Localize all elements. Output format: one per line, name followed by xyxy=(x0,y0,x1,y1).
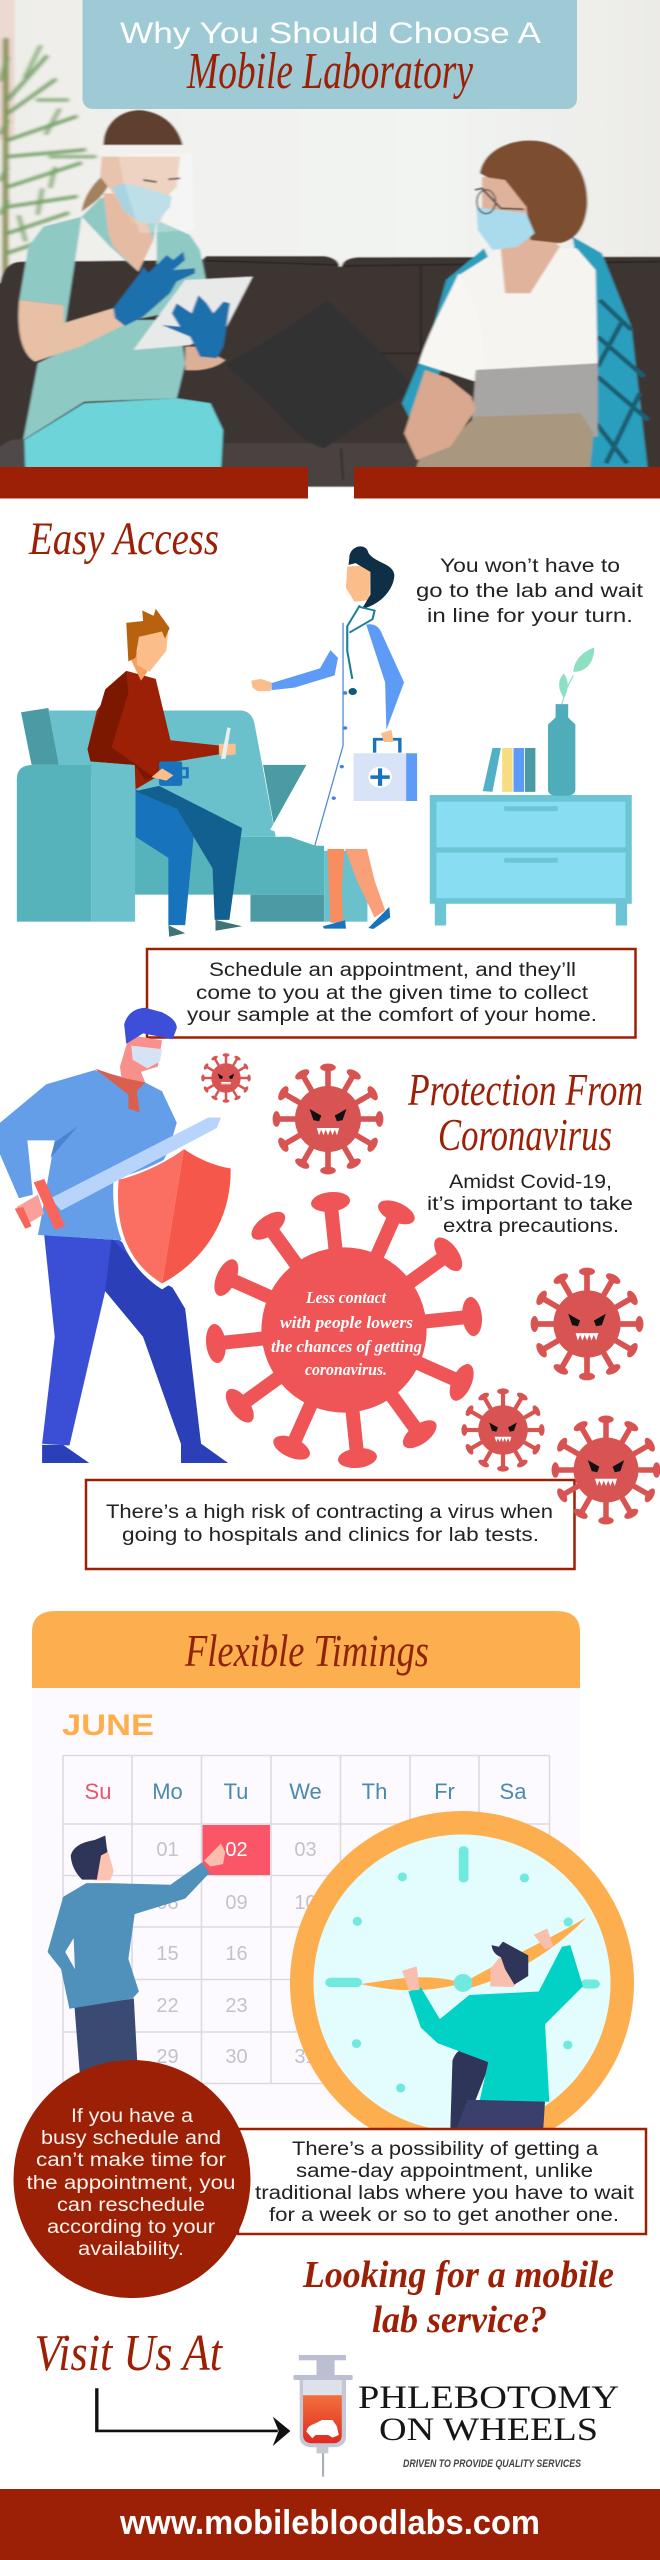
calendar header xyxy=(32,1611,580,1688)
callout: same-day appointment: traditional labs where you have to wait xyxy=(255,2183,635,2204)
callout: high risk at hospitals: There’s a high risk of contracting a virus when xyxy=(106,1502,553,1523)
calendar dates: 03 xyxy=(294,1839,317,1861)
callout: schedule an appointment xyxy=(147,949,636,1038)
text: take extra precautions xyxy=(427,1171,633,1237)
call to action heading: lab service? xyxy=(372,2299,547,2341)
brand name: PHLEBOTOMY xyxy=(358,2380,619,2416)
calendar dates: 15 xyxy=(156,1943,179,1965)
icon: virus over callout xyxy=(552,1416,660,1524)
call to action heading: Looking for a mobile xyxy=(302,2254,614,2296)
weekday headers: Tu xyxy=(224,1779,248,1804)
callout: red circle about rescheduling: can reschedule xyxy=(57,2195,205,2216)
arrow to the logo xyxy=(97,2388,290,2446)
heading: easy access: Easy Access xyxy=(28,513,219,565)
hero photo: nurse and patient on a sofa xyxy=(0,0,660,487)
weekday headers: Su xyxy=(85,1779,111,1804)
icon: virus top xyxy=(273,1064,383,1174)
nurse upper body drawn at 3x crop scale xyxy=(18,110,253,362)
calendar dates: 16 xyxy=(225,1943,248,1965)
cushion xyxy=(225,302,415,448)
weekday headers xyxy=(85,1779,527,1804)
clock markers and hands xyxy=(325,1846,600,2092)
callout: red circle about rescheduling: If you have a xyxy=(71,2106,193,2127)
big virus with message: the chances of getting xyxy=(271,1337,422,1356)
callout: red circle about rescheduling: busy schedule and xyxy=(41,2128,221,2149)
callout: schedule an appointment: your sample at the comfort of your home. xyxy=(187,1005,597,1026)
calendar dates: 29 xyxy=(156,2046,179,2068)
icon: virus lower xyxy=(461,1388,545,1472)
highlighted date xyxy=(202,1825,270,1875)
callout: high risk at hospitals: going to hospitals and clinics for lab tests. xyxy=(122,1525,539,1546)
footer with website: www.mobilebloodlabs.com xyxy=(119,2504,540,2542)
brand name: ON WHEELS xyxy=(379,2412,598,2448)
panel: protection from coronavirus xyxy=(0,1008,660,1569)
patient xyxy=(402,140,648,473)
icon: virus small xyxy=(201,1053,251,1103)
doctor with first aid kit xyxy=(251,546,417,929)
title script line: Mobile Laboratory xyxy=(186,43,474,100)
illustration: man pointing at the calendar xyxy=(48,1836,225,2076)
heading: protection from coronavirus xyxy=(407,1064,643,1160)
weekday headers: Mo xyxy=(152,1779,183,1804)
calendar dates xyxy=(156,1839,317,2068)
illustration: man pushing the clock hands xyxy=(402,1929,583,2134)
calendar dates: 22 xyxy=(156,1995,179,2017)
calendar dates: 23 xyxy=(225,1995,248,2017)
callout: same-day appointment: There’s a possibility of getting a xyxy=(292,2139,598,2160)
icon: syringe with car xyxy=(293,2355,353,2477)
calendar dates: 30 xyxy=(225,2046,248,2068)
callout: schedule an appointment: Schedule an appointment, and they’ll xyxy=(209,960,576,981)
callout: red circle about rescheduling: can’t make time for xyxy=(36,2150,227,2171)
callout: high risk at hospitals xyxy=(86,1480,574,1569)
callout: red circle about rescheduling: according to your xyxy=(47,2217,216,2238)
text: no waiting in line: in line for your turn. xyxy=(427,605,633,627)
callout: red circle about rescheduling xyxy=(14,2060,250,2298)
brand name xyxy=(358,2380,619,2448)
title line one: Why You Should Choose A xyxy=(120,17,541,50)
callout: schedule an appointment: come to you at the given time to collect xyxy=(196,983,589,1004)
calendar dates: 01 xyxy=(156,1839,179,1861)
sofa xyxy=(17,708,367,922)
nurse lower body xyxy=(24,398,223,473)
calendar dates: 08 xyxy=(156,1892,179,1914)
text: no waiting in line: You won’t have to xyxy=(440,555,620,577)
callout: red circle about rescheduling: availability. xyxy=(78,2239,184,2260)
weekday headers: Th xyxy=(362,1779,387,1804)
panel: easy access xyxy=(17,513,644,1038)
logo: phlebotomy on wheels xyxy=(293,2355,619,2477)
text: take extra precautions: it’s important to take xyxy=(427,1193,633,1215)
footer with website xyxy=(0,2489,660,2560)
calendar grid xyxy=(63,1756,550,2084)
red divider bars under the photo xyxy=(0,467,660,498)
big virus with message: Less contact xyxy=(305,1288,387,1307)
month label: JUNE xyxy=(62,1709,154,1742)
call to action heading xyxy=(302,2254,614,2341)
text: take extra precautions: Amidst Covid-19, xyxy=(449,1171,612,1193)
calendar sheet xyxy=(32,1680,580,2120)
icon: potted bamboo plant xyxy=(0,40,95,347)
weekday headers: Sa xyxy=(500,1779,527,1804)
calendar dates: 31 xyxy=(294,2046,317,2068)
callout: red circle about rescheduling: the appointment, you xyxy=(26,2173,236,2194)
weekday headers: Fr xyxy=(434,1779,455,1804)
heading: flexible timings: Flexible Timings xyxy=(184,1625,429,1676)
icon: virus right xyxy=(531,1268,643,1380)
weekday headers: We xyxy=(289,1779,322,1804)
calendar dates: 10 xyxy=(294,1892,317,1914)
clock xyxy=(290,1811,634,2155)
callout: same-day appointment: same-day appointment, unlike xyxy=(296,2161,593,2182)
calendar dates: 02 xyxy=(225,1839,248,1861)
heading: visit us at: Visit Us At xyxy=(34,2325,223,2382)
big virus with message: coronavirus. xyxy=(305,1360,387,1379)
tagline: DRIVEN TO PROVIDE QUALITY SERVICES xyxy=(403,2458,582,2470)
side table with books and vase xyxy=(430,647,632,926)
text: no waiting in line xyxy=(416,555,644,627)
callout: same-day appointment: for a week or so to get another one. xyxy=(269,2205,619,2226)
big virus with message: with people lowers xyxy=(280,1313,413,1332)
title banner xyxy=(82,0,577,109)
callout: same-day appointment xyxy=(238,2129,646,2234)
text: no waiting in line: go to the lab and wait xyxy=(416,580,644,602)
illustration: sick man on a sofa and visiting doctor xyxy=(17,546,632,937)
panel: flexible timings calendar xyxy=(14,1611,646,2298)
text: take extra precautions: extra precautions. xyxy=(443,1215,619,1237)
nurse xyxy=(18,110,253,473)
man holding thermometer xyxy=(88,609,242,937)
illustration: man with sword and shield xyxy=(0,1008,234,1463)
big virus with message xyxy=(192,1178,496,1482)
calendar dates: 09 xyxy=(225,1892,248,1914)
sofa xyxy=(0,256,660,487)
